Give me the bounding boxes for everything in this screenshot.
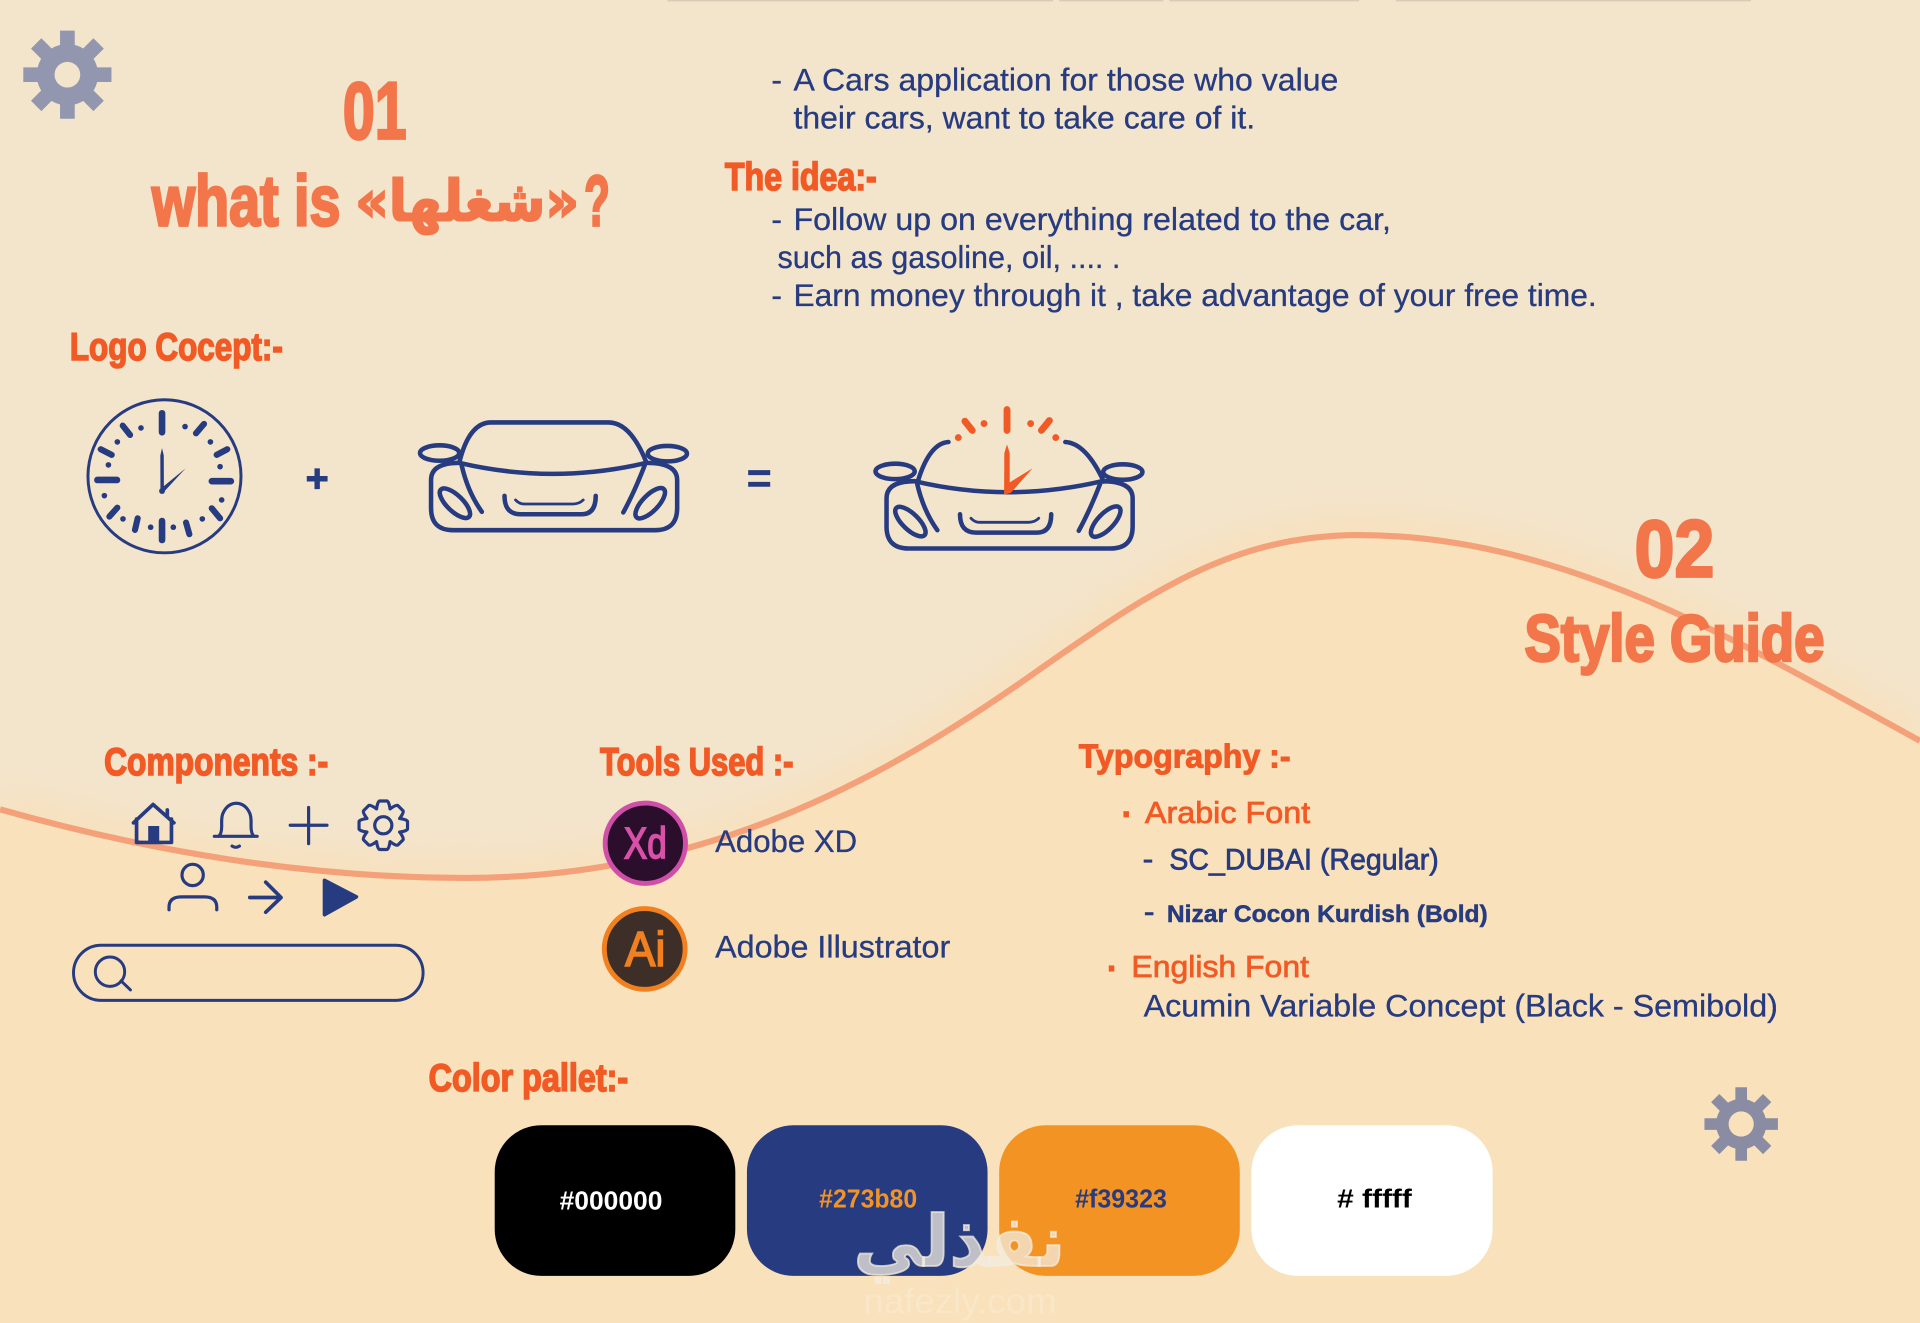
number 01: 01: [343, 66, 407, 156]
arabic font: SC_DUBAI (Regular): [1169, 843, 1439, 876]
icon: home: [134, 804, 174, 842]
swatch: white: [1251, 1125, 1493, 1276]
swatch: black: #000000: [560, 1188, 662, 1216]
lower wave background: [0, 535, 1920, 1323]
icon: gear top left: [23, 31, 111, 119]
plus sign: [307, 468, 328, 489]
icon: plus: [290, 808, 327, 844]
swatch: navy: [747, 1125, 988, 1276]
title what is: «شغلها»: [355, 169, 579, 234]
heading: tools used: Tools Used :-: [600, 741, 793, 784]
heading: logo concept: Logo Cocept:-: [70, 326, 283, 369]
idea text block: Earn money through it , take advantage of your free time.: [793, 277, 1597, 313]
panel: components: [74, 741, 423, 1000]
title what is: [151, 162, 610, 241]
english font: English Font: [1131, 950, 1309, 984]
title what is: what is: [151, 162, 340, 241]
icon: adobe xd: Xd: [624, 819, 667, 868]
intro text block: [771, 62, 1338, 136]
label: adobe xd: Adobe XD: [715, 823, 857, 859]
icon: bell: [214, 803, 257, 847]
arabic font: Arabic Font: [1145, 796, 1311, 830]
icon: arrow: [250, 882, 281, 912]
english font: [1109, 950, 1778, 1023]
arabic font: Nizar Cocon Kurdish (Bold): [1167, 901, 1488, 928]
icon: car: [420, 422, 687, 530]
watermark: nafezly.com: [863, 1281, 1057, 1321]
color palette: [495, 1125, 1493, 1276]
watermark: نفذلي: [853, 1200, 1065, 1284]
intro text block: -: [771, 62, 782, 98]
heading: typography: Typography :-: [1079, 739, 1291, 776]
intro text block: A Cars application for those who value: [793, 62, 1338, 98]
wave line: [0, 535, 1920, 878]
swatch: white: # fffff: [1337, 1185, 1412, 1213]
swatch: black: [495, 1125, 735, 1276]
icon: clock: [88, 400, 241, 553]
arabic font: [1123, 796, 1488, 928]
title style guide: Style Guide: [1524, 602, 1824, 676]
icon: logo car with clock: [876, 410, 1142, 549]
idea text block: -: [771, 201, 782, 237]
label: adobe illustrator: Adobe Illustrator: [715, 929, 951, 965]
intro text block: their cars, want to take care of it.: [793, 100, 1255, 136]
heading: color pallet: Color pallet:-: [429, 1057, 628, 1100]
icon: adobe illustrator: [604, 909, 685, 989]
swatch: orange: [999, 1125, 1240, 1276]
icon: settings: [359, 801, 408, 850]
idea text block: [771, 201, 1597, 313]
icon: play: [325, 880, 356, 915]
idea text block: such as gasoline, oil, .... .: [778, 239, 1120, 275]
title what is: ?: [584, 162, 610, 241]
panel: tools used: [600, 741, 951, 989]
search bar: [74, 945, 423, 1000]
idea text block: Follow up on everything related to the car,: [793, 201, 1391, 237]
section 02 heading: [1524, 505, 1824, 676]
section 01 heading: [151, 66, 610, 241]
watermark: [853, 1200, 1065, 1321]
english font: Acumin Variable Concept (Black - Semibold): [1144, 987, 1778, 1023]
icon: adobe xd: [605, 803, 685, 883]
heading: components: Components :-: [104, 741, 328, 784]
heading: the idea: The idea:-: [725, 156, 877, 199]
equals sign: [748, 473, 770, 484]
panel: typography: [1079, 739, 1778, 1023]
icon: adobe illustrator: Ai: [625, 923, 666, 977]
swatch: orange: #f39323: [1075, 1185, 1167, 1213]
idea text block: -: [771, 277, 782, 313]
number 02: 02: [1635, 505, 1714, 595]
swatch: navy: #273b80: [819, 1185, 917, 1213]
top edge marks: [667, 0, 1751, 2]
icon: user: [169, 864, 217, 910]
icon: gear bottom right: [1704, 1087, 1778, 1161]
